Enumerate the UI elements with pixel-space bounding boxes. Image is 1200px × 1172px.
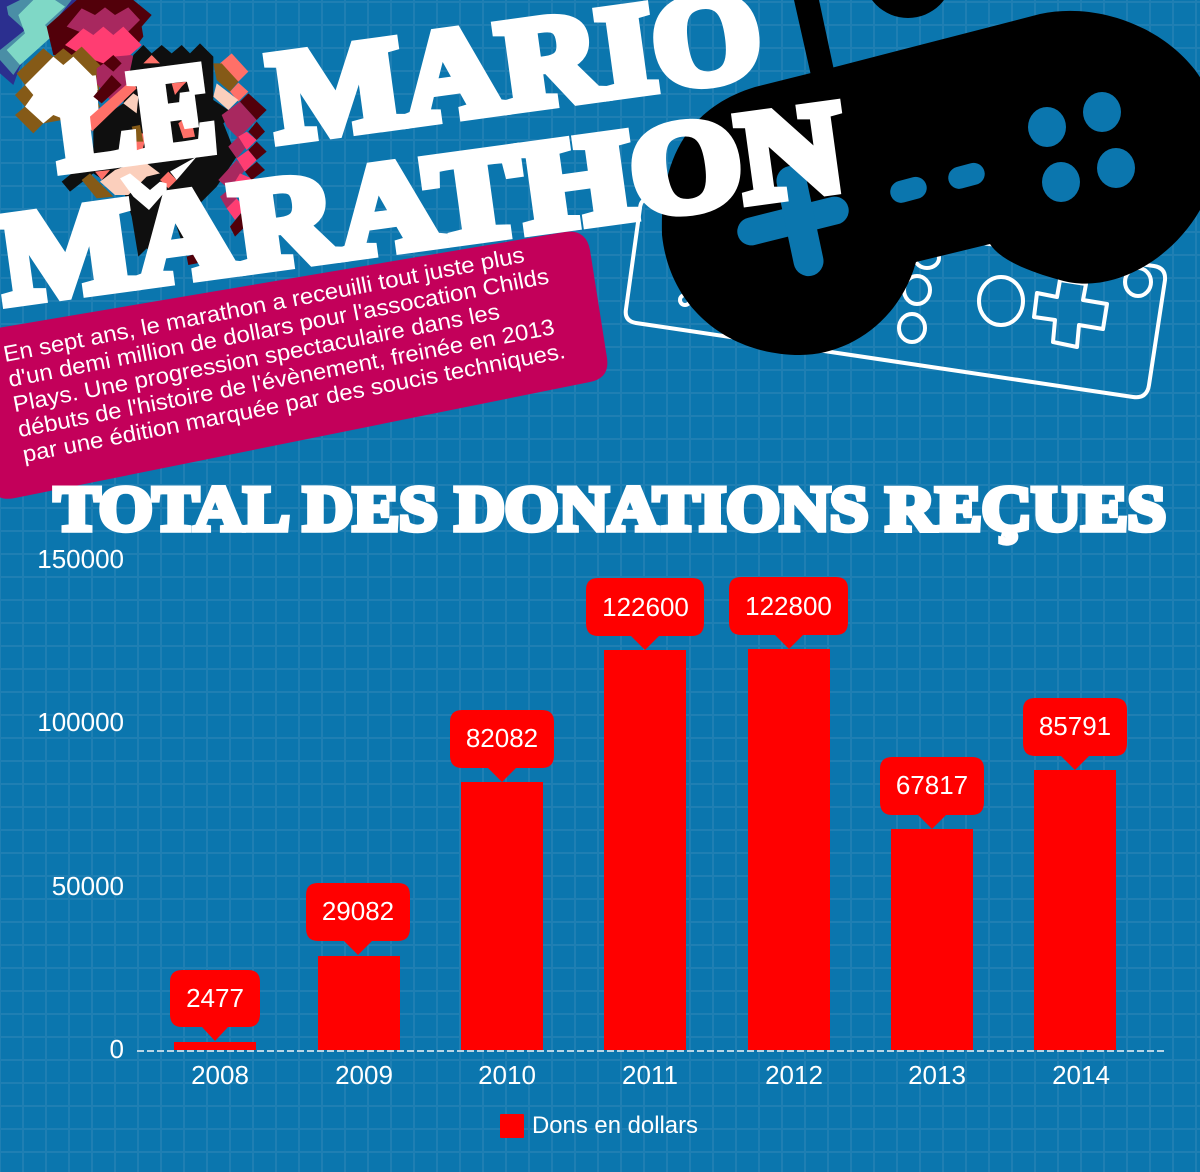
chart: y axis labels: 0 bbox=[110, 1034, 124, 1064]
chart: bars bbox=[174, 649, 1116, 1050]
icon: pixel art Mario bbox=[0, 0, 267, 265]
title bbox=[0, 0, 852, 331]
intro text: En sept ans, le marathon a receuilli tout juste plus bbox=[1, 242, 526, 367]
title: MARATHON bbox=[0, 75, 852, 331]
chart: tooltip 122800 bbox=[729, 577, 848, 649]
chart: tooltip 85791 bbox=[1023, 698, 1127, 770]
chart: legend: Dons en dollars bbox=[532, 1112, 698, 1139]
chart: tooltip 82082 bbox=[450, 710, 554, 782]
chart: x axis labels: 2014 bbox=[1052, 1060, 1110, 1090]
intro text: débuts de l'histoire de l'évènement, freinée en 2013 bbox=[16, 314, 557, 442]
chart: y axis labels bbox=[37, 544, 124, 1064]
chart: x axis labels: 2009 bbox=[335, 1060, 393, 1090]
chart: y axis labels: 100000 bbox=[37, 707, 124, 737]
chart: tooltip 85791: 85791 bbox=[1039, 711, 1111, 741]
heading: total des donations: TOTAL DES DONATIONS REÇUES bbox=[54, 473, 1166, 544]
icon: white outline game controller bbox=[626, 199, 1165, 397]
intro text bbox=[1, 238, 567, 467]
panel: intro text box bbox=[0, 232, 607, 499]
chart: x axis labels: 2010 bbox=[478, 1060, 536, 1090]
chart: tooltip 67817 bbox=[880, 757, 984, 829]
chart: x axis labels: 2013 bbox=[908, 1060, 966, 1090]
chart: tooltip 2477 bbox=[170, 970, 260, 1041]
chart: x axis labels: 2011 bbox=[622, 1060, 678, 1090]
chart: x axis labels: 2012 bbox=[765, 1060, 823, 1090]
icon: black game controller bbox=[662, 0, 1200, 355]
intro text: Plays. Une progression spectaculaire dans les bbox=[11, 299, 502, 417]
chart: x axis labels: 2008 bbox=[191, 1060, 249, 1090]
chart: tooltip 122800: 122800 bbox=[745, 591, 832, 621]
chart: y axis labels: 50000 bbox=[52, 871, 124, 901]
intro text: par une édition marquée par des soucis techniques. bbox=[21, 338, 567, 467]
chart: x axis labels bbox=[191, 1060, 1110, 1090]
title: LE bbox=[45, 36, 222, 198]
chart: tooltip 67817: 67817 bbox=[896, 770, 968, 800]
chart: baseline bbox=[137, 1050, 1166, 1052]
chart: y axis labels: 150000 bbox=[37, 544, 124, 574]
chart: tooltip 82082: 82082 bbox=[466, 723, 538, 753]
chart: tooltip 122600 bbox=[586, 578, 704, 650]
chart: tooltip 29082 bbox=[306, 883, 410, 955]
chart: tooltip 122600: 122600 bbox=[602, 592, 689, 622]
chart: tooltip 2477: 2477 bbox=[186, 983, 244, 1013]
chart: tooltip 29082: 29082 bbox=[322, 896, 394, 926]
intro text: d'un demi million de dollars pour l'assocation Childs bbox=[6, 263, 551, 392]
